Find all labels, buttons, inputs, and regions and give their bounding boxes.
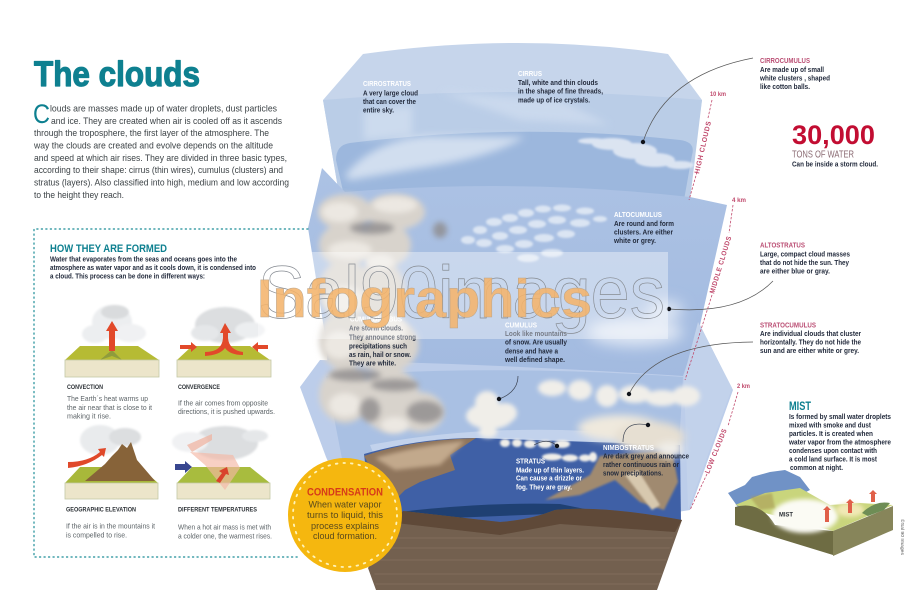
note: mist: mixed with smoke and dust (789, 420, 871, 430)
note: stratocumulus: Are individual clouds that cluster (760, 329, 861, 338)
label: altocumulus: ALTOCUMULUS (614, 210, 662, 219)
high clouds layer (323, 43, 702, 200)
caption: convergence: If the air comes from opposite (178, 398, 268, 408)
caption: different temperatures: When a hot air mass is met with (178, 522, 271, 532)
caption: convection: The Earth´s heat warms up (67, 394, 148, 403)
note: mist: MIST (789, 401, 811, 413)
label: nimbostratus (603, 443, 689, 478)
label: cumulonimbus: They are white. (349, 358, 396, 368)
label: stratus: Can cause a drizzle or (516, 474, 582, 482)
badge: condensation: CONDENSATION (307, 486, 383, 498)
cumulus puff (466, 391, 517, 438)
watermark orange text: Infographics (257, 269, 592, 329)
badge: condensation: process explains (311, 521, 379, 532)
panel intro text (50, 254, 256, 280)
note: stratocumulus: STRATOCUMULUS (760, 320, 816, 330)
caption: convection (67, 384, 152, 420)
note: mist (788, 401, 891, 472)
note: cirrocumulus: Are made up of small (760, 65, 824, 74)
label: cumulus: well defined shape. (504, 355, 565, 364)
illustration: geographic elevation (65, 425, 158, 499)
stratus clouds (500, 439, 597, 462)
ground and sea (364, 438, 682, 590)
drop cap: C (33, 99, 50, 129)
panel intro text: a cloud. This process can be done in different ways: (50, 272, 205, 280)
curved arrow (68, 448, 106, 468)
note: altostratus (760, 240, 850, 276)
note: mist: common at night. (790, 463, 843, 472)
badge: condensation: cloud formation. (313, 531, 377, 542)
cirrus streaks (440, 92, 610, 125)
label: cumulus: Look like mountains (505, 329, 567, 338)
label: cirrostratus (363, 79, 418, 114)
warm arrow (216, 467, 229, 483)
label: altocumulus: white or grey. (613, 236, 656, 245)
note: stratocumulus (760, 320, 861, 355)
label: stratus: fog. They are gray. (516, 482, 572, 492)
4 km: 4 km (732, 197, 746, 204)
diagram labels (349, 69, 689, 492)
note: cirrocumulus: CIRROCUMULUS (760, 56, 810, 65)
note: mist: Is formed by small water droplets (789, 412, 891, 421)
label: altocumulus: clusters. Are either (614, 228, 673, 236)
caption: convergence (178, 384, 275, 416)
label: cumulus: of snow. Are usually (505, 338, 568, 346)
caption: geographic elevation: If the air is in the mountains it (66, 522, 155, 530)
note: mist: water vapor from the atmosphere (788, 438, 891, 446)
note: cirrocumulus: like cotton balls. (760, 82, 810, 91)
atmosphere diagram (300, 43, 773, 590)
label: stratus (516, 456, 584, 492)
mist label: MIST (779, 512, 793, 518)
intro text block: and speed at which air rises. They are divided in three basic types, (34, 152, 287, 163)
caption: convergence: directions, it is pushed upwards. (178, 407, 275, 416)
label: cirrostratus: A very large cloud (363, 88, 418, 98)
illustration: different temperatures (172, 426, 270, 499)
label: cirrus: in the shape of fine threads, (518, 86, 603, 96)
altostratus cloud (587, 301, 683, 346)
caption: different temperatures: a colder one, the warmest rises. (178, 532, 272, 540)
panel: how they are formed (34, 229, 308, 557)
caption: geographic elevation: is compelled to rise. (66, 530, 127, 540)
coastline left (364, 438, 476, 500)
note: stratocumulus: horizontally. They do not hide the (760, 338, 861, 346)
label: cumulus: CUMULUS (505, 320, 537, 330)
intro text block: through the troposphere, the first layer of the atmosphere. The (34, 127, 269, 138)
label: cumulonimbus: precipitations such (349, 342, 407, 350)
middle clouds layer (308, 168, 727, 388)
note: cirrocumulus (759, 56, 830, 91)
panel intro text: atmosphere as water vapor and as it cools down, it is condensed into (50, 263, 256, 272)
illustration: mist landscape (728, 470, 893, 556)
side notes (759, 56, 891, 472)
watermark outline text: Sal90images (258, 251, 665, 334)
label: cirrostratus: entire sky. (363, 106, 394, 114)
label: cumulonimbus (349, 314, 416, 368)
stat: 30,000 tons of water: 30,000 (792, 120, 875, 150)
note: mist: a cold land surface. It is most (789, 454, 877, 464)
middle clouds label: MIDDLE CLOUDS (709, 235, 733, 295)
stat: 30,000 tons of water: Can be inside a storm cloud. (792, 160, 878, 168)
caption: different temperatures: DIFFERENT TEMPERATURES (178, 506, 258, 514)
altitude scale (685, 91, 750, 510)
label: altocumulus: Are round and form (614, 219, 674, 228)
caption: convergence: CONVERGENCE (178, 384, 220, 391)
label: stratus: Made up of thin layers. (516, 466, 584, 474)
cumulus row (538, 380, 700, 407)
caption: convection: making it rise. (67, 412, 111, 420)
high clouds label: HIGH CLOUDS (694, 120, 713, 174)
note: altostratus: that do not hide the sun. They (760, 258, 850, 267)
label: cirrus (518, 69, 603, 104)
illustration: convergence (177, 307, 271, 377)
label: nimbostratus: rather continuous rain or (603, 460, 679, 469)
cumulonimbus tower (318, 194, 447, 433)
panel intro text: Water that evaporates from the seas and oceans goes into the (50, 254, 237, 264)
coastline right (545, 450, 678, 510)
nimbostratus cloud (578, 415, 685, 458)
note: mist: condenses upon contact with (789, 446, 877, 455)
dotted border (34, 229, 308, 557)
note: altostratus: are either blue or gray. (760, 266, 830, 276)
callouts (497, 58, 773, 448)
altocumulus cloud (461, 204, 607, 262)
label: cirrus: Tall, white and thin clouds (518, 78, 598, 87)
label: nimbostratus: snow precipitations. (603, 468, 663, 478)
2 km: 2 km (737, 383, 750, 390)
label: cirrostratus: CIRROSTRATUS (363, 79, 411, 88)
low clouds label: LOW CLOUDS (704, 428, 729, 475)
intro text block (33, 99, 289, 200)
caption: convection: the air near that is close to it (67, 403, 152, 412)
label: cumulonimbus: Are storm clouds. (349, 324, 403, 332)
note: altostratus: ALTOSTRATUS (760, 240, 805, 250)
caption: different temperatures (178, 506, 272, 540)
label: cumulonimbus: as rain, hail or snow. (349, 350, 411, 359)
label: stratus: STRATUS (516, 456, 545, 466)
illustration: convection (65, 305, 159, 377)
stat: 30,000 tons of water (792, 120, 878, 168)
low level clouds (466, 380, 700, 462)
intro text block: way the clouds are created and evolve depends on the altitude (33, 140, 273, 150)
intro text block: louds are masses made up of water droplets, dust particles (50, 102, 277, 114)
note: altostratus: Large, compact cloud masses (760, 250, 850, 258)
caption: geographic elevation: GEOGRAPHIC ELEVATION (66, 506, 136, 514)
label: nimbostratus: Are dark grey and announce (603, 452, 689, 460)
label: cumulonimbus: CUMULONIMBUS (350, 314, 402, 324)
label: nimbostratus: NIMBOSTRATUS (603, 443, 654, 452)
caption: geographic elevation (66, 506, 155, 540)
panel heading: HOW THEY ARE FORMED (50, 243, 167, 255)
intro text block: according to their shape: cirrus (thin wires), cumulus (clusters) and (34, 164, 283, 175)
title: The clouds (34, 55, 200, 94)
credit: ©Sal 90 Images (900, 519, 906, 556)
cirrocumulus cloud (578, 138, 694, 169)
label: cirrostratus: that can cover the (363, 97, 416, 106)
stat: 30,000 tons of water: TONS OF WATER (792, 150, 854, 160)
label: cumulonimbus: They announce strong (349, 332, 416, 342)
note: mist: particles. It is created when (789, 429, 873, 438)
label: altocumulus (613, 210, 674, 245)
label: cumulus (504, 320, 568, 364)
watermark (257, 251, 668, 339)
arrow up (106, 321, 118, 351)
intro text block: stratus (layers). Also classified into high, medium and low according (34, 176, 289, 188)
intro text block: and ice. They are created when air is cooled off as it ascends (51, 115, 282, 126)
label: cirrus: CIRRUS (518, 69, 542, 78)
arrows converging (180, 323, 268, 356)
badge: condensation (288, 458, 402, 572)
caption: convection: CONVECTION (67, 384, 103, 391)
soil (368, 509, 682, 590)
cirrostratus cloud (345, 106, 525, 180)
badge: condensation: turns to liquid, this (307, 510, 383, 521)
label: cirrus: made up of ice crystals. (518, 96, 590, 104)
cold arrow (175, 461, 192, 473)
note: cirrocumulus: white clusters , shaped (759, 74, 830, 82)
intro text block: to the height they reach. (34, 189, 124, 200)
label: cumulus: dense and have a (505, 346, 559, 356)
10 km: 10 km (710, 91, 726, 98)
note: stratocumulus: sun and are either white or grey. (760, 346, 859, 355)
badge: condensation: When water vapor (308, 500, 382, 510)
low clouds layer (300, 322, 733, 560)
